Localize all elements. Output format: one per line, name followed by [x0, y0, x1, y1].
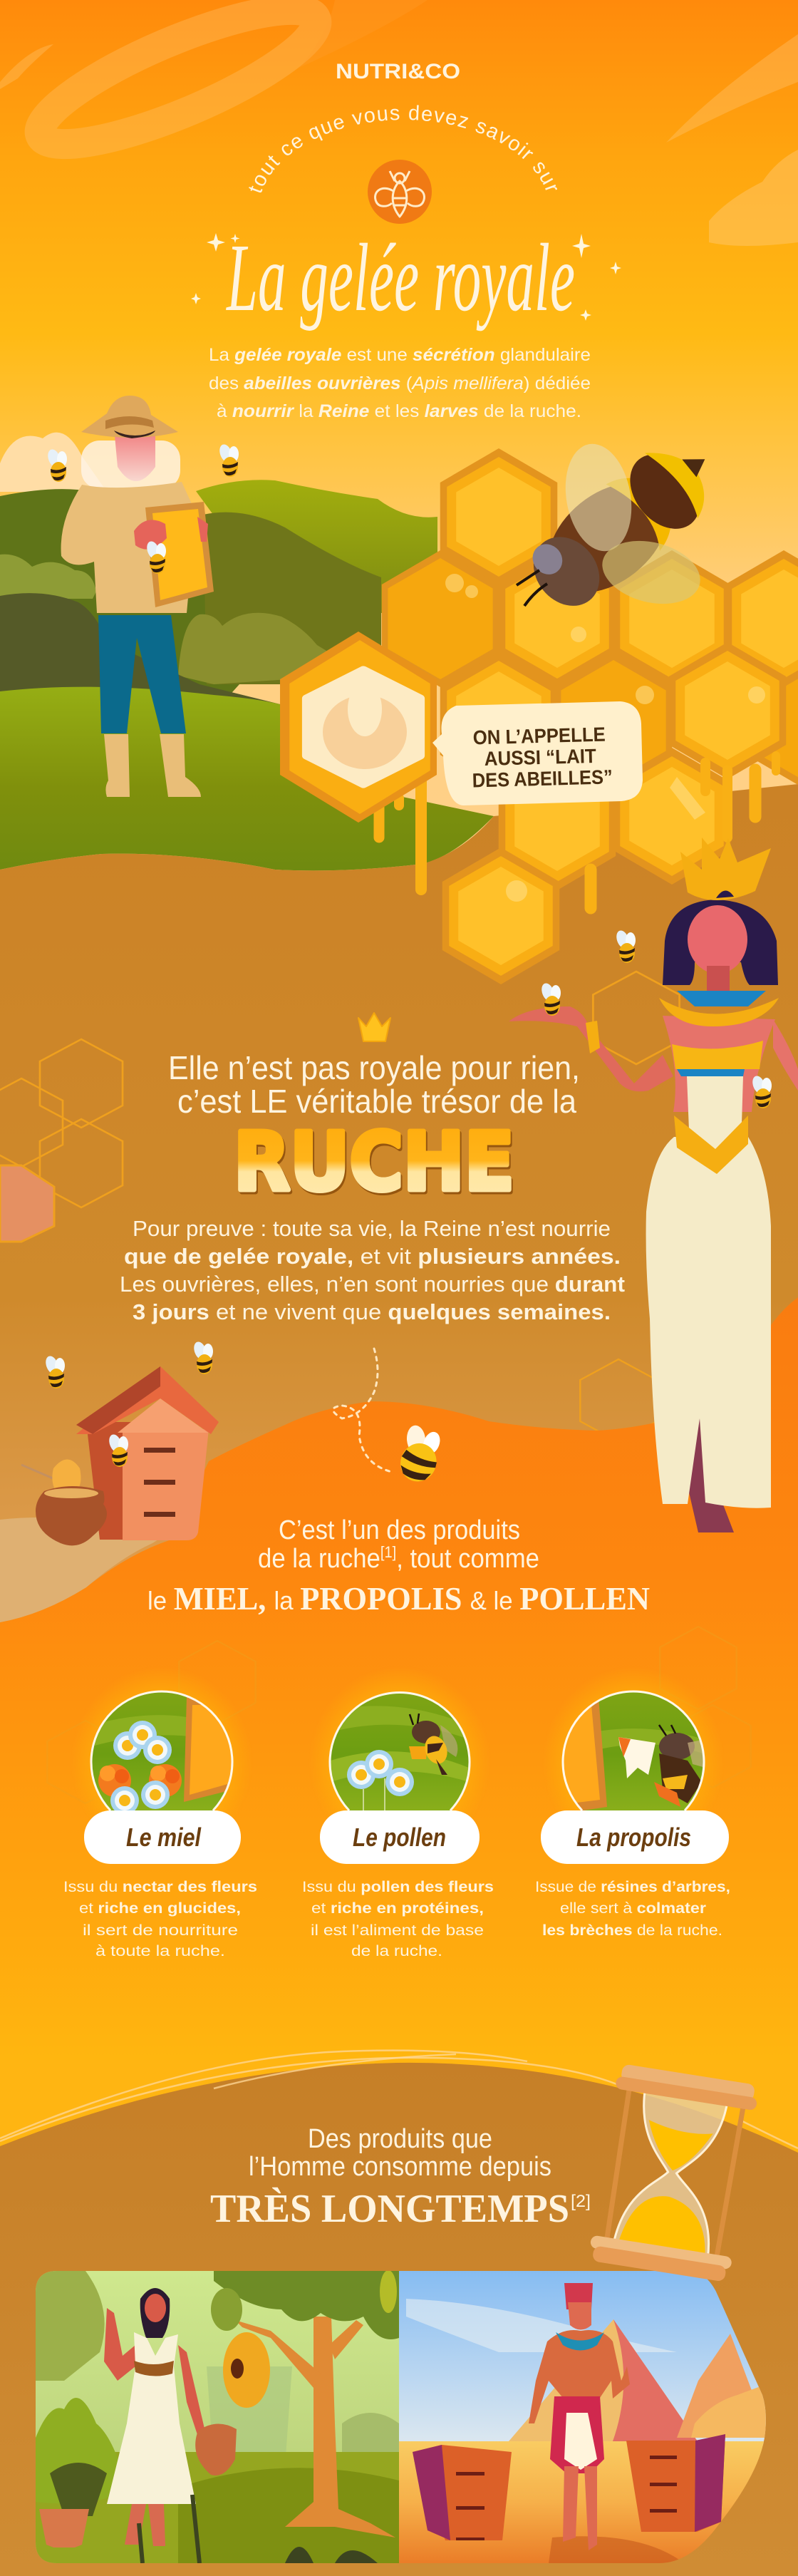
- card: Le pollen: il est l’aliment de base: [311, 1922, 484, 1939]
- paragraph: queen vs workers: [120, 1216, 625, 1324]
- card: Le pollen: de la ruche.: [351, 1943, 442, 1959]
- intro paragraph: à nourrir la Reine et les larves de la ruche.: [217, 401, 581, 421]
- speech bubble: DES ABEILLES”: [472, 766, 613, 791]
- sparkles: [191, 233, 621, 321]
- background: lower section with arc: [0, 2063, 798, 2576]
- small bees: [43, 443, 772, 1389]
- card: Le pollen: [302, 1666, 494, 1959]
- heading: very long time: l’Homme consomme depuis: [249, 2152, 551, 2182]
- intro paragraph: La gelée royale est une sécrétion glandulaire: [209, 345, 591, 365]
- card: La propolis: La propolis: [576, 1823, 691, 1852]
- speech bubble: AUSSI “LAIT: [484, 745, 596, 770]
- paragraph: queen vs workers: que de gelée royale, et vit plusieurs années.: [124, 1244, 621, 1269]
- heading: products of the hive: , tout comme: [396, 1544, 539, 1574]
- heading: treasure of the hive: c’est LE véritable trésor de la: [177, 1083, 576, 1120]
- background: brown section: [0, 784, 798, 1639]
- card: Le miel: Issu du nectar des fleurs: [63, 1879, 257, 1895]
- speech bubble: ON L’APPELLE: [472, 723, 606, 748]
- crown icon: [358, 1013, 390, 1041]
- heading: treasure of the hive: Elle n’est pas royale pour rien,: [168, 1049, 580, 1086]
- ground under hive: [0, 1518, 164, 1622]
- card: La propolis: elle sert à colmater: [560, 1900, 706, 1917]
- card: Le pollen: Issu du pollen des fleurs: [302, 1879, 494, 1895]
- faint hexagons behind cards: [47, 1627, 751, 1803]
- beekeeper: [61, 396, 214, 797]
- heading: products of the hive: C’est l’un des produits: [279, 1515, 520, 1545]
- arc stripes: [0, 2051, 798, 2148]
- honey pot: [21, 1460, 107, 1545]
- card: Le miel: à toute la ruche.: [95, 1943, 225, 1959]
- heading: very long time: [210, 2124, 591, 2231]
- card: Le miel: il sert de nourriture: [83, 1922, 238, 1939]
- queen: [509, 838, 798, 1532]
- card: La propolis: Issue de résines d’arbres,: [535, 1879, 730, 1895]
- word: RUCHE: RUCHE: [234, 1116, 514, 1209]
- heading: products of the hive: [147, 1515, 650, 1617]
- arched tagline: tout ce que vous devez savoir sur: [249, 105, 557, 192]
- card: Le pollen: et riche en protéines,: [311, 1900, 484, 1917]
- panel: ancient Greece scene: [36, 2270, 399, 2563]
- speech bubble: [432, 701, 643, 805]
- background: sky top section: [0, 0, 798, 927]
- paragraph: queen vs workers: 3 jours et ne vivent que quelques semaines.: [133, 1299, 611, 1324]
- card: Le pollen: Le pollen: [353, 1823, 446, 1852]
- card: La propolis: les brèches de la ruche.: [542, 1922, 722, 1939]
- heading: treasure of the hive: [168, 1049, 580, 1120]
- icon: bee badge: [368, 160, 432, 224]
- decorative swirl clouds: [0, 0, 798, 246]
- intro paragraph: des abeilles ouvrières (Apis mellifera ) dédiée: [209, 373, 591, 393]
- paragraph: queen vs workers: Pour preuve : toute sa vie, la Reine n’est nourrie: [133, 1216, 611, 1241]
- card: Le miel: et riche en glucides,: [79, 1900, 241, 1917]
- heading: products of the hive: [1]: [380, 1543, 396, 1561]
- hive: [76, 1366, 219, 1540]
- large flying bee: [389, 1419, 448, 1487]
- card: La propolis: [535, 1666, 730, 1939]
- heading: very long time: TRÈS LONGTEMPS: [210, 2187, 569, 2231]
- panel: ancient Egypt scene: [399, 2271, 770, 2563]
- dashed flight path: [333, 1349, 392, 1472]
- honeycomb: [382, 448, 798, 984]
- landscape: clouds and hills: [0, 433, 494, 870]
- background: orange section: [0, 1297, 798, 2060]
- heading: products of the hive: le MIEL, la PROPOLIS & le POLLEN: [147, 1580, 650, 1617]
- outline hexagons: [0, 972, 680, 1442]
- royal jelly cell: [280, 632, 437, 823]
- intro paragraph: [209, 345, 591, 421]
- paragraph: queen vs workers: Les ouvrières, elles, n’en sont nourries que durant: [120, 1272, 625, 1297]
- card: Le miel: Le miel: [126, 1823, 202, 1852]
- big bee: [515, 425, 732, 624]
- heading: products of the hive: de la ruche: [258, 1544, 392, 1574]
- bee on hive: [107, 1433, 128, 1467]
- card: Le miel: [63, 1666, 257, 1959]
- heading: very long time: Des produits que: [308, 2124, 492, 2154]
- logo: Nutri&Co: NUTRI&CO: [336, 60, 460, 83]
- honey drips: [379, 756, 776, 908]
- hourglass: [588, 2064, 760, 2282]
- heading: very long time: [2]: [571, 2192, 591, 2211]
